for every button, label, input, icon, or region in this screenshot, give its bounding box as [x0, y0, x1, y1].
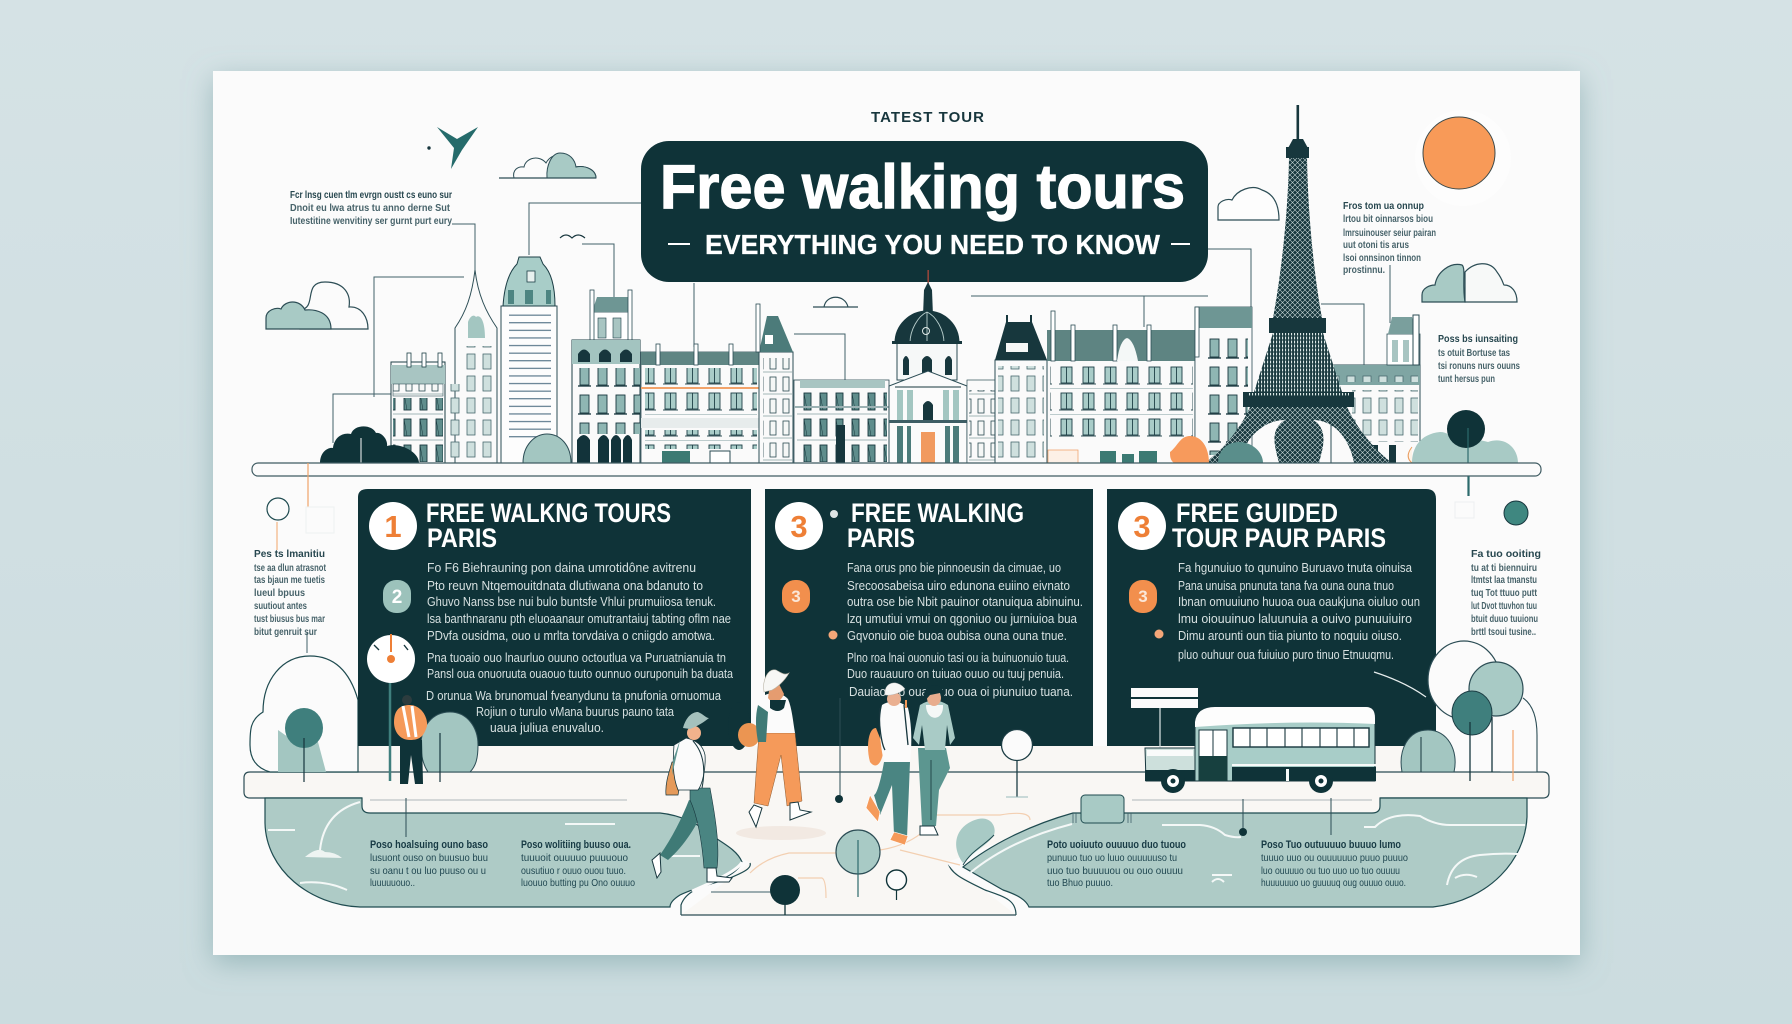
panel 3 text: Fa hgunuiuo to qunuino Buruavo tnuta oinuisa: [1178, 561, 1412, 575]
panel 3: [1107, 489, 1436, 746]
panel 2 text: Duo rauauuro on tuiuao ouuo ou tuuj penuia.: [847, 667, 1064, 681]
walker C: [866, 683, 911, 845]
building 1: [391, 353, 445, 463]
lower text block 4: Poso Tuo outuuuuo buuuo lumo: [1261, 839, 1401, 851]
panel 2 text: lzq umutiui vmui on qgoniuo ou jurniuioa bua: [847, 612, 1077, 626]
text block middle right: ts otuit Bortuse tas: [1438, 348, 1510, 359]
right text block: tu at ti biennuiru: [1471, 563, 1537, 574]
text block upper right: lmrsuinouser seiur pairan: [1343, 228, 1436, 239]
panel 1: [358, 489, 751, 746]
heading 3: [1172, 498, 1386, 553]
building 11: [1047, 311, 1195, 463]
building 7: [794, 380, 889, 463]
building 4: [572, 290, 640, 463]
heading 1: PARIS: [427, 523, 497, 553]
teal bush: [523, 434, 571, 463]
text block left: Pes ts lmanitiu: [254, 548, 325, 560]
right text block: lut Dvot ttuvhon tuu: [1471, 601, 1537, 612]
white small tree: [886, 870, 906, 900]
right light bushes: [1412, 432, 1518, 463]
teal-dark bush: [1218, 442, 1263, 463]
lower text block 3: [1047, 839, 1186, 889]
bushes along ground: [320, 410, 1518, 496]
panel 1 text: [426, 561, 733, 735]
cloud near tower: [1218, 188, 1279, 220]
right text block: brttl tsoui tusine..: [1471, 627, 1536, 638]
gray dividers: [370, 799, 1372, 801]
text block middle right: tunt hersus pun: [1438, 374, 1495, 385]
lower text block 2: Poso wolitiing buuso oua.: [521, 839, 631, 851]
left tree outline: [250, 656, 358, 782]
plaza ground behind panels: [358, 746, 1436, 915]
text block left: tas bjaun me tuetis: [254, 575, 325, 586]
small badge 3b: 3: [1138, 587, 1148, 606]
orange dot 3: [1154, 630, 1164, 638]
text block top left: Iutestitine wenvitiny ser gurnt purt eury: [290, 216, 452, 227]
left column decoration: [267, 498, 334, 653]
heading 3: TOUR PAUR PARIS: [1172, 523, 1386, 553]
bird: [560, 235, 585, 238]
badge 1: [369, 502, 417, 550]
panel 1 text: Pna tuoaio ouo lnaurluo ouuno octoutlua va Puruatnianuia tn: [427, 651, 726, 665]
lower text block 1: luuuuuouo..: [370, 877, 415, 889]
title text: Free walking tours: [660, 153, 1185, 222]
panel 1 text: Rojiun o turulo vMana buurus pauno tata: [476, 705, 674, 719]
right text block: ltmtst laa tmanstu: [1471, 575, 1537, 586]
teal tree: [836, 830, 880, 897]
dark bush: [320, 426, 419, 463]
small badge 3b: [1129, 580, 1157, 613]
text block left: bitut genruit sur: [254, 627, 317, 638]
panel 3 text: Dimu arounti oun tiia piunto to noquiu oiuso.: [1178, 629, 1402, 643]
right text block: tuq Tot ttuuo putt: [1471, 588, 1538, 599]
lower text block 1: su oanu t ou luo puuso ou u: [370, 865, 486, 877]
panel 3 text: pluo ouhuur oua fuiuiuo puro tinuo Etnuuqmu.: [1178, 648, 1394, 662]
text block upper right: [1343, 200, 1436, 276]
badge 1: 1: [384, 509, 402, 544]
guide figure: [394, 695, 478, 784]
text block upper right: lrtou bit oinnarsos biou: [1343, 214, 1433, 225]
text block left: tust biusus bus mar: [254, 614, 325, 625]
teal marker block: [1081, 795, 1124, 823]
heading 2: [847, 498, 1024, 553]
panel 3 text: [1178, 561, 1420, 662]
right text block: btuit duuo tuuionu: [1471, 614, 1538, 625]
skyline: [391, 257, 1420, 463]
icon: airplane: [427, 127, 478, 169]
heading 2: PARIS: [847, 523, 915, 553]
badge 2: 3: [790, 509, 808, 544]
lower text block 3: punuuo tuo uo luuo ouuuuuso tu: [1047, 852, 1177, 864]
text block middle right: [1438, 333, 1520, 385]
lower text block 3: uuo tuo buuuuou ou ouo ouuuu: [1047, 865, 1183, 877]
lower text block 4: luo ouuuuo ou tuo uuo uo tuo ouuuu: [1261, 865, 1400, 877]
brand label: TATEST TOUR: [871, 109, 984, 126]
lower text block 4: tuuuo uuo ou ouuuuuuo puuo puuuo: [1261, 852, 1408, 864]
dark tree: [770, 875, 800, 915]
small badge 3: [782, 580, 810, 613]
orange dot: [828, 630, 838, 640]
panel 2 text: Dauiao Tio ouaouuo oua oi piunuiuo tuana.: [849, 685, 1073, 699]
orange bush: [1170, 436, 1209, 463]
panel 1 text: uaua juliua enuvaluo.: [490, 721, 604, 735]
panel 2 text: Plno roa lnai ouonuio tasi ou ia buinuonuio tuua.: [847, 651, 1069, 665]
text block upper right: Fros tom ua onnup: [1343, 200, 1424, 212]
text block upper right: lsoi onnsinon tinnon: [1343, 253, 1421, 264]
building 2 gothic spire: [444, 270, 498, 463]
panel 2 text: Gqvonuio oie buoa oubisa ouna ouna tnue.: [847, 629, 1067, 643]
small badge 2: [383, 580, 411, 613]
walker A: [652, 712, 732, 882]
clock icon on pole: [367, 634, 415, 781]
ground bar: [252, 463, 1541, 476]
cloud left: [266, 282, 368, 329]
lower text block 2: [521, 839, 635, 889]
connector lines: [333, 203, 1390, 443]
panel 1 text: Pansl oua onuoruuta ouaouo tuuto ounnuo ouruponuih ba duata: [427, 667, 733, 681]
subtitle with dashes: EVERYTHING YOU NEED TO KNOW: [705, 229, 1161, 260]
dome building: [889, 270, 967, 463]
small badge 3: 3: [791, 587, 801, 606]
panel 2 text: [847, 561, 1083, 699]
right trees: [1401, 641, 1537, 781]
walker B: [728, 670, 811, 827]
panel 1 text: Fo F6 Biehrauning pon daina umrotidône avitrenu: [427, 561, 696, 575]
panel 3 text: Ibnan omuuiuno huuoa oua oaukjuna oiuluo oun: [1178, 595, 1420, 609]
panel 1 text: Ghuvo Nanss bse nui bulo buntsfe Vhlui prumuiiosa tenuk.: [427, 595, 716, 609]
panel 1 text: PDvfa ousidma, ouo u mrlta torvdaiva o cniigdo amotwa.: [427, 629, 715, 643]
text block middle right: tsi ronuns nurs ouuns: [1438, 361, 1520, 372]
center path: [681, 813, 1030, 915]
building 5: [641, 344, 759, 463]
bus: [1145, 707, 1376, 793]
text block upper right: prostinnu.: [1343, 265, 1385, 276]
small street trees: [770, 730, 1032, 915]
lower text block 3: Poto uoiuuto ouuuuo duo tuouo: [1047, 839, 1186, 851]
text block upper right: uut otoni tis arus: [1343, 240, 1409, 251]
text block top left: [290, 189, 452, 227]
panel 1 text: D orunua Wa brunomual fveanydunu ta pnufonia ornuomua: [426, 689, 721, 703]
panel 3 text: lmu oiouuinuo laluunuia a ouivo punuuiuiro: [1178, 612, 1412, 626]
text block left: lueul bpuus: [254, 588, 305, 599]
bus wheels: [1161, 769, 1333, 793]
lower text block 4: huuuuuuo uo guuuuq oug ouuuo ouuo.: [1261, 877, 1406, 889]
right text block: Fa tuo ooiting: [1471, 548, 1541, 560]
badge 2: [775, 502, 823, 550]
title panel: [641, 141, 1208, 282]
right water area: [956, 795, 1527, 907]
panel 3 text: Pana unuisa pnunuta tana fva ouna ouna tnuo: [1178, 579, 1394, 593]
lower text block 2: luouuo butting pu Ono ouuuo: [521, 877, 635, 889]
text block left: [254, 548, 327, 638]
panel 2 text: Fana orus pno bie pinnoeusin da cimuae, uo: [847, 561, 1061, 575]
pale square and dark circle right: [1455, 501, 1528, 525]
panel 2 text: Srecoosabeisa uiro edunona euiino eivnato: [847, 579, 1070, 593]
teal leaf: [956, 818, 995, 863]
lower text block 1: lusuont ouso on buusuo buu: [370, 852, 488, 864]
cloud right: [1422, 264, 1517, 302]
white card: [213, 71, 1580, 955]
sign: [1131, 688, 1198, 748]
Eiffel Tower: [1205, 105, 1392, 463]
right text block: [1471, 548, 1541, 638]
panel 1 text: lsa banthnaranu pth eluoaanaur omutrantaiuj tabting oflm nae: [427, 612, 731, 626]
lower text block 4: [1261, 839, 1408, 889]
heading 1: FREE WALKNG TOURS: [426, 498, 671, 528]
street band: [244, 772, 1549, 798]
guide lines: [406, 698, 1331, 837]
lower text block 1: [370, 839, 488, 889]
text block top left: Dnoit eu lwa atrus tu anno derne Sut: [290, 203, 451, 214]
heading 1: [426, 498, 671, 553]
text block top left: Fcr lnsg cuen tlm evrgn oustt cs euno sur: [290, 189, 452, 201]
walker D: [913, 685, 955, 835]
text block middle right: Poss bs iunsaiting: [1438, 333, 1518, 345]
text block left: suutiout antes: [254, 601, 307, 612]
lower text block 2: ousutiuo r ouuo ouou tuuo.: [521, 865, 626, 877]
text block left: tse aa dlun atrasnot: [254, 563, 327, 574]
line end dots: [835, 795, 1247, 836]
orange tick: [307, 463, 309, 507]
white curve: [1374, 672, 1426, 697]
teal tick: [1468, 476, 1470, 496]
small cloud horizon: [813, 297, 858, 307]
orange sun: [1415, 110, 1511, 206]
cloud top left: [499, 153, 596, 178]
building 3 dome tower: [501, 257, 557, 463]
dark round tree: [1447, 410, 1485, 448]
building 12: [1195, 307, 1252, 463]
building 9: [967, 380, 995, 463]
building right of tower: [1331, 315, 1420, 463]
white tree on street: [1002, 730, 1032, 797]
building 10: [995, 315, 1047, 463]
panel 1 text: Pto reuvn Ntqemouitdnata dlutiwana ona bdanuto to: [427, 579, 703, 593]
building 6: [756, 304, 793, 463]
left water area: [265, 798, 742, 907]
heading 3: FREE GUIDED: [1176, 498, 1338, 528]
small badge 2: 2: [392, 587, 402, 608]
panel 2 text: outra ose bie Nbit pauinor otanuiqua abinuinu.: [847, 595, 1083, 609]
badge 3: [1118, 502, 1166, 550]
panel 2: [765, 489, 1093, 746]
lower text block 3: tuo Bhuo puuuo.: [1047, 877, 1113, 889]
lower text block 2: tuuuoit ouuuuo puuuouo: [521, 852, 628, 864]
dot: [830, 510, 838, 518]
lower text block 1: Poso hoalsuing ouno baso: [370, 839, 488, 851]
heading 2: FREE WALKING: [851, 498, 1024, 528]
badge 3: 3: [1133, 509, 1151, 544]
